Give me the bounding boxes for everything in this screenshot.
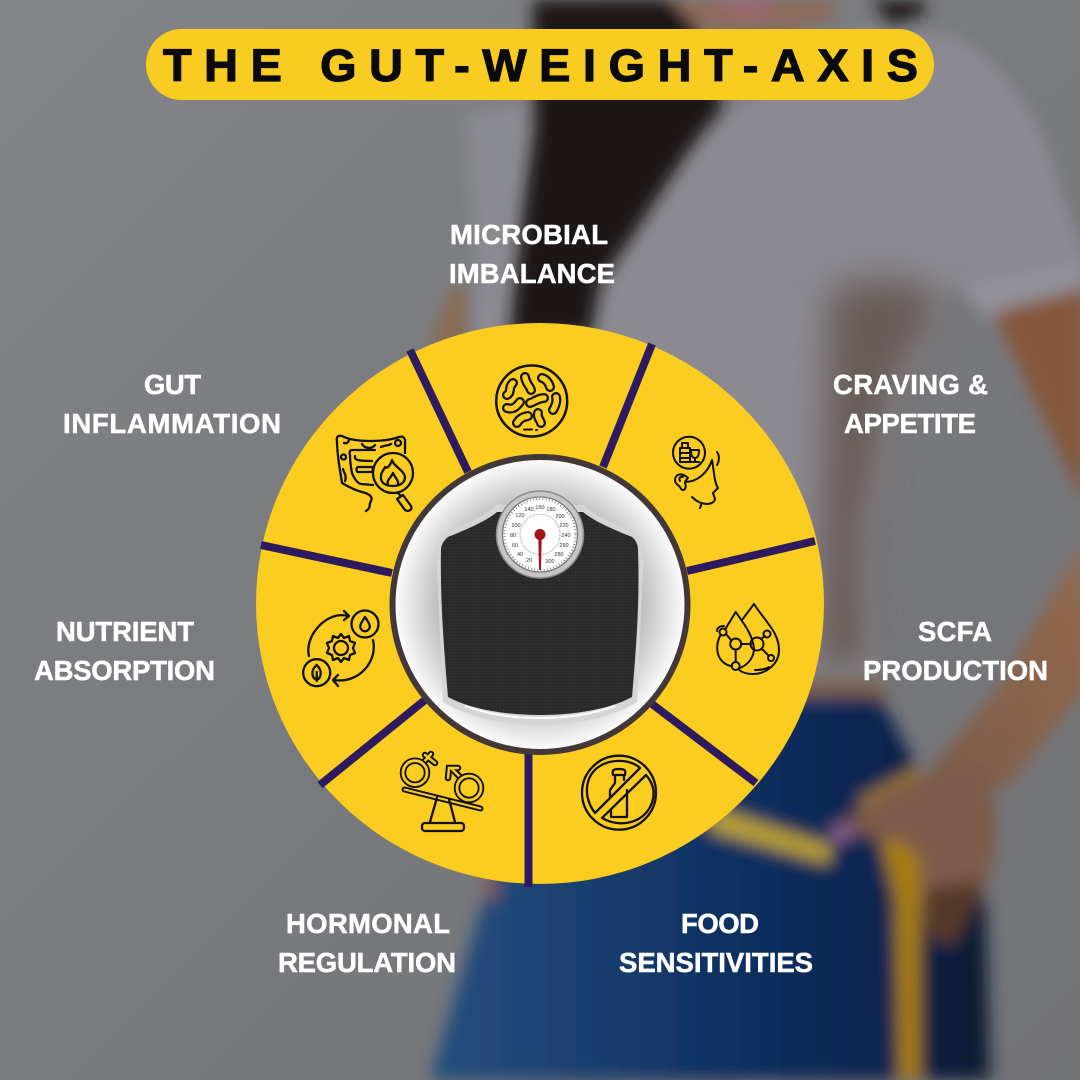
scale dial: 80 (510, 533, 516, 539)
label: craving and appetite: CRAVING & (833, 369, 988, 400)
scale dial: 120 (515, 513, 525, 519)
label: nutrient absorption: NUTRIENT (56, 616, 194, 647)
scale dial: 160 (535, 505, 545, 511)
scale dial: 280 (554, 552, 564, 558)
label: microbial imbalance (449, 219, 615, 289)
label: hormonal regulation: REGULATION (278, 947, 456, 978)
label: craving and appetite (833, 369, 988, 439)
icon: SCFA droplets with molecule (717, 604, 779, 674)
label: scfa production: PRODUCTION (863, 655, 1048, 686)
scale mat (436, 505, 644, 725)
label: scfa production: SCFA (918, 616, 992, 647)
label: food sensitivities: SENSITIVITIES (619, 947, 813, 978)
label: hormonal regulation (278, 908, 456, 978)
icon: microbes in circle (496, 366, 567, 436)
label: scfa production (863, 616, 1048, 686)
icon: intestine with flame under magnifier (337, 436, 413, 511)
scale dial: 200 (555, 514, 565, 520)
label: gut inflammation: GUT (144, 369, 201, 400)
label: craving and appetite: APPETITE (844, 408, 976, 439)
icon: no bottle prohibition sign (582, 756, 656, 830)
scale dial: 40 (517, 552, 523, 558)
scale dial: 220 (559, 523, 569, 529)
title banner (146, 29, 934, 100)
label: food sensitivities (619, 908, 813, 978)
label: microbial imbalance: MICROBIAL (450, 219, 608, 250)
label: hormonal regulation: HORMONAL (286, 908, 450, 939)
center: bathroom scale disc (392, 457, 688, 752)
label: gut inflammation (63, 369, 281, 439)
scale dial: 20 (526, 558, 532, 564)
scale dial (496, 491, 584, 578)
scale dial: 140 (524, 507, 534, 513)
title banner: THE GUT-WEIGHT-AXIS (163, 40, 918, 91)
label: nutrient absorption (34, 616, 215, 686)
scale dial: 300 (545, 559, 555, 565)
scale dial: 260 (559, 543, 569, 549)
label: nutrient absorption: ABSORPTION (34, 655, 215, 686)
icon: hormonal balance seesaw (403, 754, 481, 831)
scale dial: 100 (511, 523, 521, 529)
scale dial: 240 (561, 533, 571, 539)
label: gut inflammation: INFLAMMATION (63, 408, 281, 439)
scale dial: 180 (546, 507, 556, 513)
label: food sensitivities: FOOD (681, 908, 759, 939)
icon: craving head with bottle and glass (673, 437, 719, 508)
yellow wheel (256, 323, 824, 887)
scale dial: 60 (512, 543, 518, 549)
icon: nutrient cycle (303, 610, 378, 686)
label: microbial imbalance: IMBALANCE (449, 258, 615, 289)
